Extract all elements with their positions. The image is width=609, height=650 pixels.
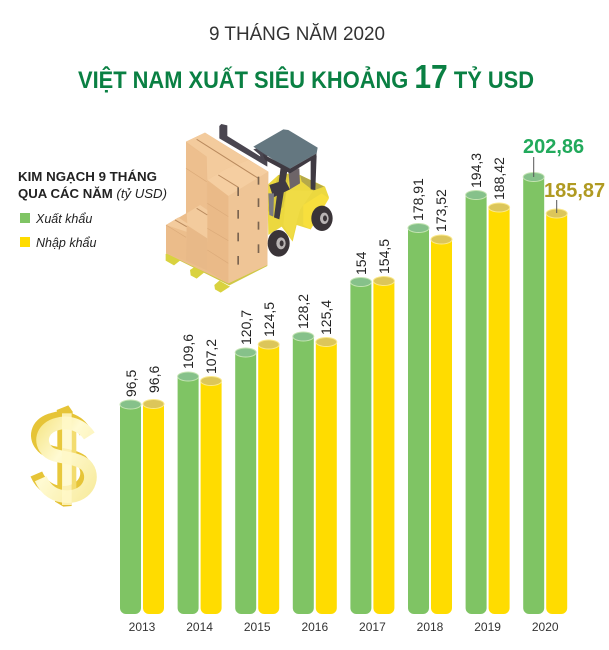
pallet [166, 250, 267, 293]
icon: gold dollar sign [36, 405, 90, 507]
boxes [166, 133, 268, 283]
callout: 2020 export [523, 136, 584, 177]
value labels: 154,5 [376, 239, 392, 274]
value labels: 128,2 [295, 294, 311, 329]
front wheel [268, 230, 290, 257]
value labels: 125,4 [318, 300, 334, 335]
year axis labels: 2013 [129, 620, 156, 634]
forklift posts [311, 155, 317, 190]
icon: forklift with boxes [166, 124, 333, 293]
value labels: 194,3 [468, 153, 484, 188]
bars 2016 [293, 332, 337, 614]
value labels: 173,52 [433, 189, 449, 232]
value labels [123, 153, 507, 397]
bars 2020 [523, 172, 567, 614]
callout: 2020 import [544, 180, 605, 213]
year axis labels: 2019 [474, 620, 501, 634]
title: VIỆT NAM XUẤT SIÊU KHOẢNG 17 TỶ USD [78, 58, 534, 95]
forklift body [267, 173, 329, 242]
value labels: 124,5 [261, 302, 277, 337]
bars 2013 [120, 400, 164, 614]
legend: Nhập khẩu [36, 236, 97, 250]
value labels: 154 [353, 251, 369, 275]
legend [18, 169, 167, 250]
bars 2014 [178, 372, 222, 614]
year axis labels: 2020 [532, 620, 559, 634]
title [78, 22, 534, 95]
year axis labels: 2017 [359, 620, 386, 634]
callout: 2020 export: 202,86 [523, 136, 584, 158]
callout: 2020 import: 185,87 [544, 180, 605, 202]
value labels: 107,2 [203, 339, 219, 374]
chart: bars [120, 172, 567, 614]
legend: Xuất khẩu [35, 212, 92, 226]
rear wheel [311, 206, 333, 231]
value labels: 178,91 [410, 178, 426, 221]
bars 2018 [408, 224, 452, 614]
forklift mast [219, 124, 263, 163]
bars 2015 [235, 340, 279, 614]
value labels: 96,5 [123, 370, 139, 397]
forklift seat [288, 168, 300, 189]
bars 2017 [350, 276, 394, 614]
year axis labels: 2014 [186, 620, 213, 634]
value labels: 109,6 [180, 334, 196, 369]
value labels: 120,7 [238, 310, 254, 345]
year axis labels: 2016 [301, 620, 328, 634]
value labels: 188,42 [491, 157, 507, 200]
legend: KIM NGẠCH 9 THÁNG [18, 169, 157, 184]
forklift roof [253, 129, 318, 169]
value labels: 96,6 [146, 366, 162, 393]
year axis labels: 2018 [417, 620, 444, 634]
bars 2019 [466, 190, 510, 614]
year axis labels [129, 620, 559, 634]
legend: QUA CÁC NĂM (tỷ USD) [18, 186, 167, 201]
year axis labels: 2015 [244, 620, 271, 634]
title: 9 THÁNG NĂM 2020 [209, 22, 385, 45]
